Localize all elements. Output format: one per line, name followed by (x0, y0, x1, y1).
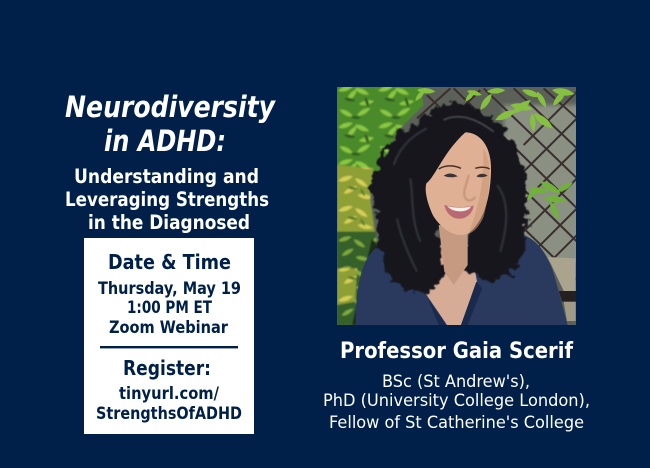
eyebrows (439, 166, 490, 169)
lattice (417, 88, 577, 280)
register link (96, 383, 242, 423)
infographic canvas (66, 87, 588, 434)
speaker credentials: BSc (St Andrew's), (382, 372, 530, 392)
speaker credentials (323, 372, 590, 433)
chest (424, 245, 477, 325)
date details (98, 278, 241, 337)
leaves right (527, 182, 573, 220)
bench (548, 257, 576, 291)
title (65, 90, 276, 158)
photo: portrait of speaker (337, 85, 580, 327)
speaker credentials: Fellow of St Catherine's College (329, 413, 584, 433)
leaves top right (414, 87, 575, 132)
date details: 1:00 PM ET (127, 297, 212, 317)
wall tone (504, 105, 580, 262)
mouth (444, 205, 474, 219)
nose (464, 175, 475, 200)
title: Neurodiversity (65, 90, 276, 124)
register link: tinyurl.com/ (119, 383, 220, 403)
title: in ADHD: (104, 124, 226, 158)
register link: StrengthsOfADHD (96, 403, 242, 423)
date details: Zoom Webinar (109, 317, 229, 337)
neck (439, 225, 468, 285)
subtitle (65, 165, 269, 234)
panel: date and registration (84, 238, 254, 434)
speaker credentials: PhD (University College London), (323, 391, 590, 411)
date heading: Date & Time (108, 250, 231, 274)
register heading: Register: (123, 356, 211, 380)
eyes (444, 173, 488, 177)
speaker name: Professor Gaia Scerif (340, 339, 573, 364)
top (356, 235, 568, 325)
subtitle: in the Diagnosed (88, 211, 250, 234)
face (426, 132, 491, 235)
subtitle: Understanding and (74, 165, 259, 188)
hair back (370, 104, 527, 293)
date details: Thursday, May 19 (98, 278, 241, 298)
foliage left (337, 85, 424, 325)
hair highlights (444, 117, 494, 132)
subtitle: Leveraging Strengths (65, 188, 269, 211)
